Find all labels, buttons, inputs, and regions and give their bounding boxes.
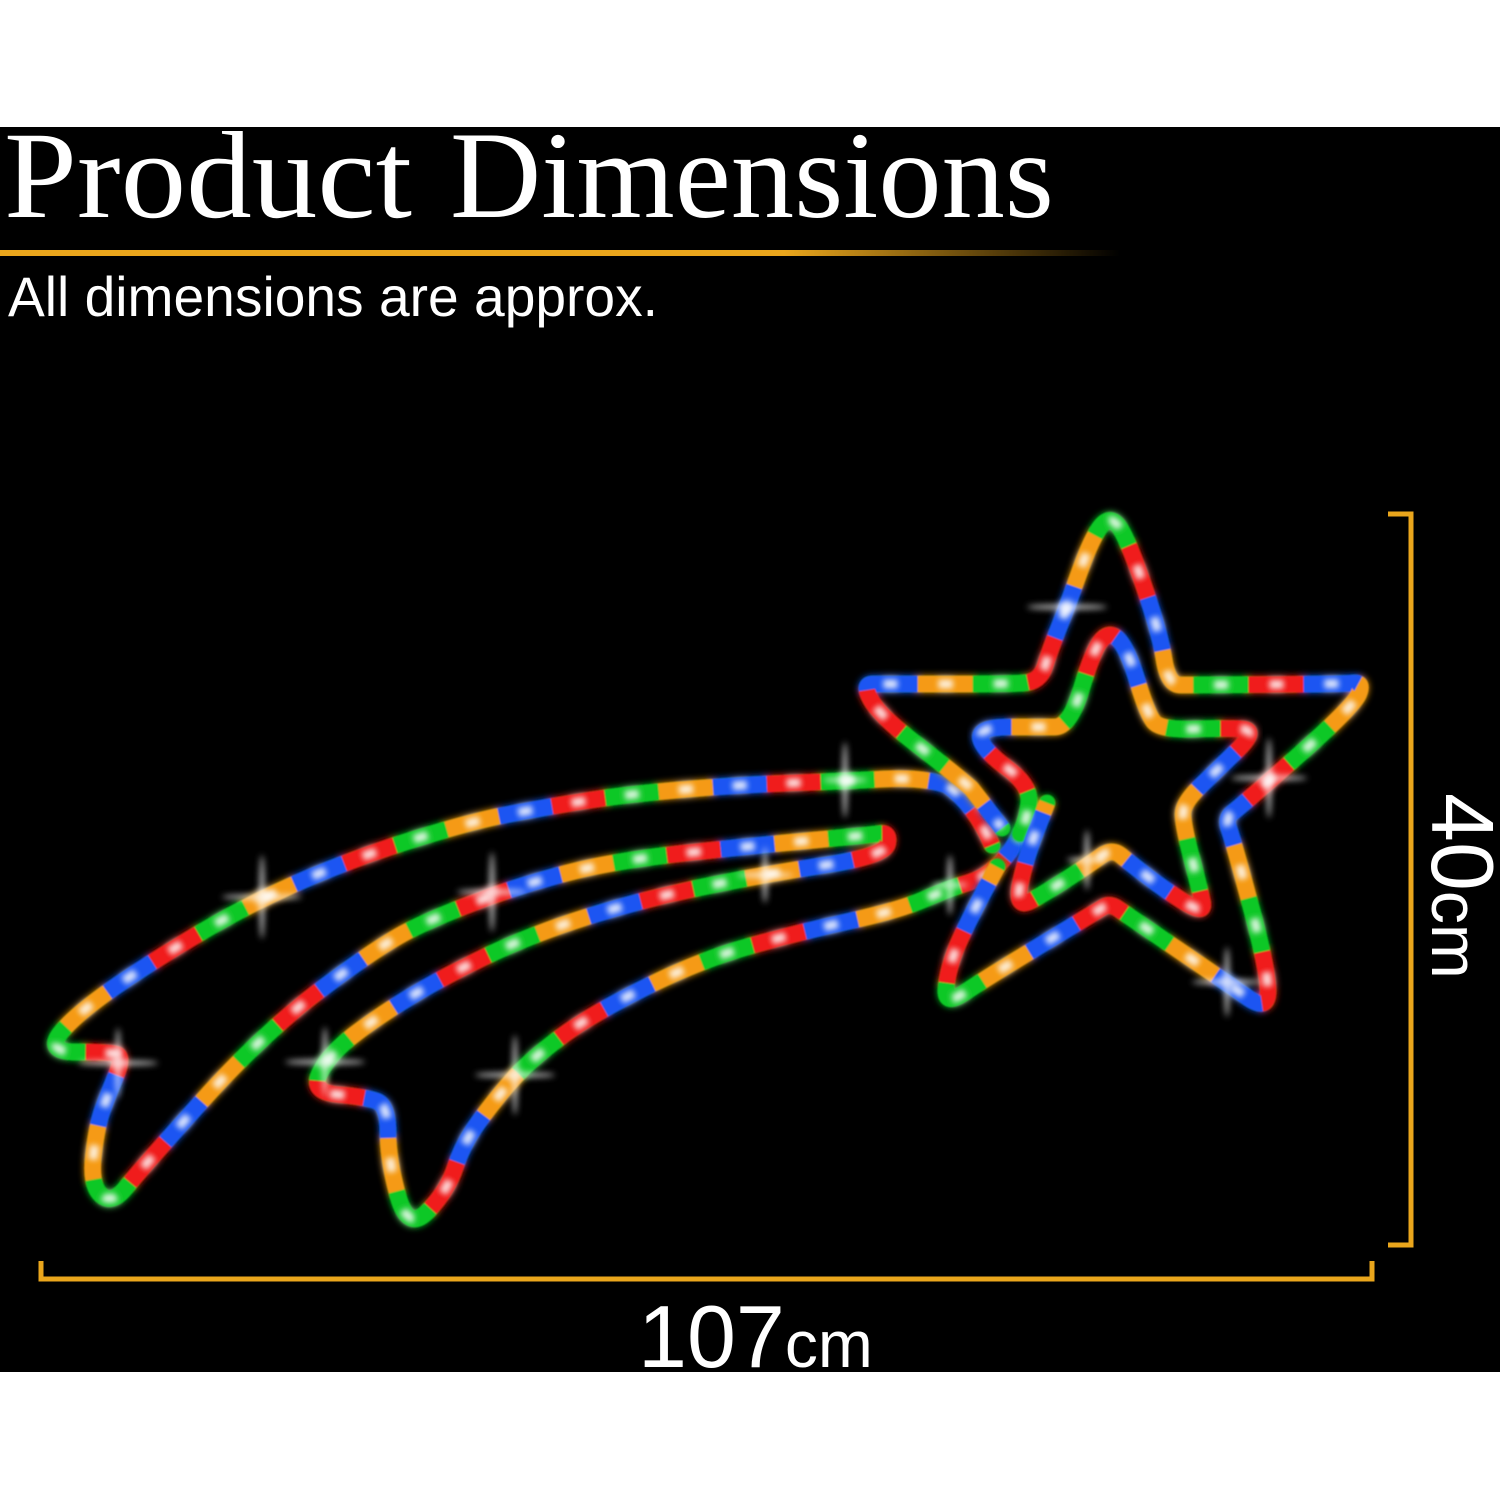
title bbox=[4, 107, 1054, 244]
white band top bbox=[0, 0, 1500, 127]
title: Product bbox=[4, 107, 412, 244]
height bracket bbox=[1388, 514, 1411, 1245]
width label: 107cm bbox=[638, 1287, 873, 1386]
inner star rope light bbox=[980, 635, 1249, 909]
outer star rope light bbox=[867, 520, 1360, 1003]
title: Dimensions bbox=[450, 107, 1054, 244]
sparkle highlights bbox=[78, 600, 1307, 1115]
subtitle: All dimensions are approx. bbox=[8, 265, 658, 328]
width bracket bbox=[41, 1261, 1372, 1279]
gold title rule bbox=[0, 250, 1120, 256]
shooting star tail rope light bbox=[56, 779, 1020, 1219]
white band bottom bbox=[0, 1372, 1500, 1500]
